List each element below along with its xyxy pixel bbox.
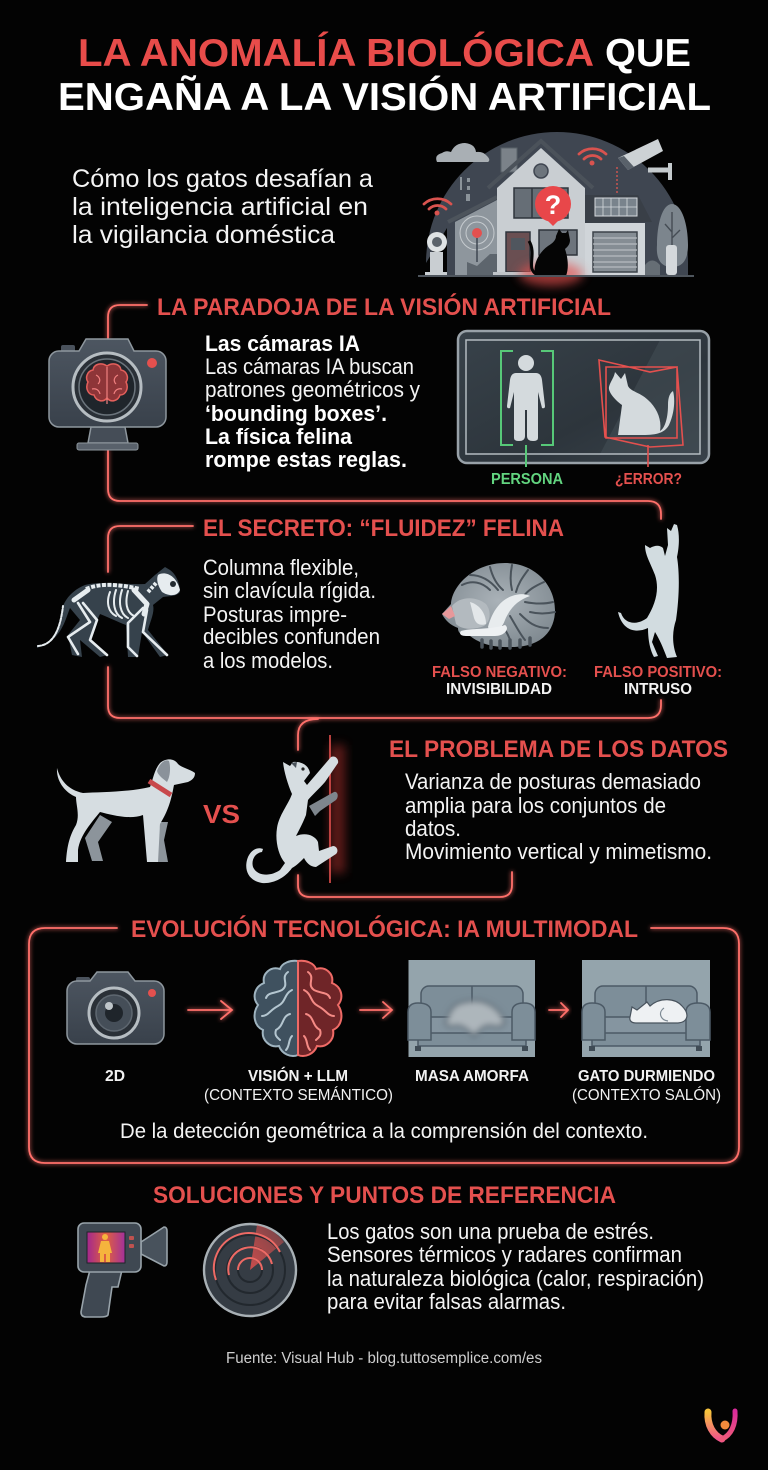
label: falso negativo: INVISIBILIDAD [446, 681, 552, 698]
text block: la paradoja: ‘bounding boxes’. [205, 401, 387, 426]
image: sofa with amorphous mass [408, 960, 535, 1057]
text block: el problema [405, 769, 712, 864]
connector: camera to text [168, 388, 190, 390]
labels: process steps: MASA AMORFA [415, 1068, 529, 1085]
label: falso positivo [594, 664, 722, 698]
text block: soluciones: Sensores térmicos y radares confirman [327, 1242, 682, 1267]
text block: la paradoja: Las cámaras IA [205, 331, 360, 356]
text block: soluciones: Los gatos son una prueba de estrés. [327, 1219, 654, 1244]
connector: section three frame [298, 719, 512, 897]
text block: la paradoja: patrones geométricos y [205, 377, 420, 402]
title: QUE [605, 32, 691, 75]
text block: la paradoja: rompe estas reglas. [205, 447, 407, 472]
text block: el problema: datos. [405, 816, 461, 841]
heading: soluciones: SOLUCIONES Y PUNTOS DE REFERENCIA [153, 1182, 616, 1209]
icon: dog [57, 759, 195, 862]
panel: detection screen [458, 331, 709, 467]
text block: soluciones: para evitar falsas alarmas. [327, 1289, 566, 1314]
text block: el secreto: sin clavícula rígida. [203, 578, 376, 603]
arrow [188, 1001, 232, 1019]
text block: soluciones [327, 1219, 704, 1314]
arrow [549, 1003, 568, 1017]
connector: section one frame [108, 305, 661, 519]
text block: el secreto: Columna flexible, [203, 555, 359, 580]
label: falso negativo [432, 664, 567, 698]
label: falso positivo: INTRUSO [624, 681, 692, 698]
labels: process steps: (CONTEXTO SALÓN) [572, 1085, 721, 1104]
icon: smart house with cat [418, 132, 694, 286]
label: vs: VS [203, 799, 240, 829]
caption: evolución: De la detección geométrica a la comprensión del contexto. [120, 1119, 648, 1143]
labels: process steps: VISIÓN + LLM [248, 1066, 348, 1085]
text block: el secreto: a los modelos. [203, 648, 333, 673]
text block: el secreto [203, 555, 380, 673]
icon: thermal camera [78, 1223, 167, 1317]
text block: soluciones: la naturaleza biológica (calor, respiración) [327, 1266, 704, 1291]
label: falso negativo: FALSO NEGATIVO: [432, 664, 567, 681]
icon: two-colour brain [255, 961, 341, 1056]
subtitle: la vigilancia doméstica [72, 221, 335, 249]
text block: el problema: Varianza de posturas demasiado [405, 769, 701, 794]
ground line [47, 863, 198, 865]
icon: smart house with cat: ? [545, 190, 561, 220]
title: LA ANOMALÍA BIOLÓGICA [78, 31, 594, 75]
icon: curled tabby cat [442, 563, 555, 648]
icon: radar [204, 1224, 296, 1316]
title: ENGAÑA A LA VISIÓN ARTIFICIAL [58, 75, 711, 119]
arrow [360, 1002, 392, 1018]
title [58, 31, 711, 119]
text block: la paradoja: La física felina [205, 424, 353, 449]
icon: camera with brain [49, 339, 166, 450]
labels: process steps: 2D [105, 1068, 125, 1085]
labels: process steps: (CONTEXTO SEMÁNTICO) [204, 1085, 393, 1104]
text block: el problema: amplia para los conjuntos de [405, 793, 666, 818]
panel frame: evolución tecnológica [29, 928, 739, 1163]
icon: logo [708, 1411, 735, 1439]
red distorted boxes [599, 360, 683, 447]
label: persona: PERSONA [491, 471, 563, 488]
heading: el problema de los datos: EL PROBLEMA DE LOS DATOS [389, 736, 728, 763]
heading: la paradoja: LA PARADOJA DE LA VISIÓN ARTIFICIAL [157, 293, 611, 321]
text block: el secreto: Posturas impre- [203, 602, 347, 627]
green bounding box [501, 351, 553, 467]
connector: text to screen [437, 388, 458, 390]
image: sofa with sleeping cat [582, 960, 710, 1057]
text block: el problema: Movimiento vertical y mimetismo. [405, 839, 712, 864]
subtitle: la inteligencia artificial en [72, 193, 368, 221]
subtitle [72, 165, 373, 249]
heading: el secreto: EL SECRETO: “FLUIDEZ” FELINA [203, 515, 564, 542]
wall with red glow [330, 735, 345, 883]
text block: la paradoja: Las cámaras IA buscan [205, 354, 414, 379]
person silhouette [507, 355, 545, 441]
text block: la paradoja [205, 331, 420, 472]
icon: 2d camera [67, 972, 164, 1044]
subtitle: Cómo los gatos desafían a [72, 165, 373, 193]
labels: process steps [105, 1066, 721, 1104]
label: error: ¿ERROR? [615, 471, 682, 488]
icon: cat skeleton [37, 567, 180, 657]
text block: el secreto: decibles confunden [203, 624, 380, 649]
label: falso positivo: FALSO POSITIVO: [594, 664, 722, 681]
heading: evolución tecnológica: EVOLUCIÓN TECNOLÓGICA: IA MULTIMODAL [131, 915, 638, 943]
cat silhouette [609, 372, 674, 435]
connector: section two frame [108, 526, 661, 718]
labels: process steps: GATO DURMIENDO [578, 1068, 715, 1085]
source line: Fuente: Visual Hub - blog.tuttosemplice.com/es [226, 1350, 542, 1367]
icon: stretching cat [618, 524, 679, 658]
icon: climbing cat [246, 756, 338, 883]
